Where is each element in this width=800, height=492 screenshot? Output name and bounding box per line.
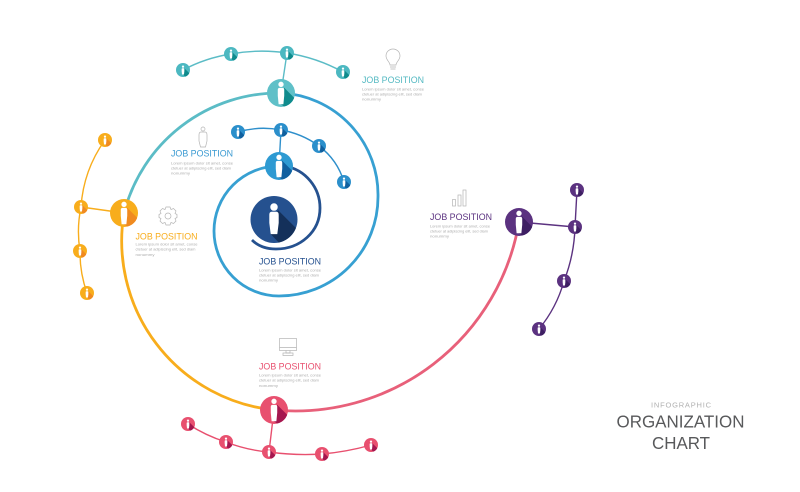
text: blue job position bbox=[171, 148, 234, 176]
node: yellow 3 bbox=[73, 244, 90, 262]
text: yellow job position: ctetuer at adipiscing elit, sed diam bbox=[136, 246, 196, 252]
text: teal job position bbox=[362, 75, 425, 102]
text: purple job position: nonummy bbox=[430, 234, 449, 238]
text: purple job position: ctetuer at adipiscing elit, sed diam bbox=[430, 228, 489, 234]
text: pink job position: Lorem ipsum dolor sit amet, conse bbox=[259, 372, 322, 378]
node: blue 2 bbox=[274, 123, 292, 140]
text: yellow job position bbox=[136, 232, 198, 257]
node: pink 1 bbox=[181, 417, 198, 434]
node: yellow 2 bbox=[74, 200, 92, 218]
node: purple 2 bbox=[568, 220, 586, 238]
node: blue main bbox=[265, 152, 300, 187]
branch: pink bbox=[181, 396, 382, 464]
text: dark blue job position bbox=[259, 256, 322, 282]
icon: light bulb bbox=[386, 49, 400, 69]
text: dark blue job position: ctetuer at adipiscing elit, sed diam bbox=[259, 272, 320, 278]
text: yellow job position: Lorem ipsum dolor sit amet, conse bbox=[136, 242, 198, 246]
text: purple job position: JOB POSITION bbox=[430, 212, 492, 222]
icon: monitor bbox=[280, 338, 296, 356]
text: blue job position: nonummy bbox=[171, 170, 190, 176]
text: pink job position: ctetuer at adipiscing elit, sed diam bbox=[259, 378, 320, 382]
node: pink main bbox=[260, 396, 295, 431]
title: CHART bbox=[652, 433, 710, 453]
icon: bar chart bbox=[452, 190, 466, 206]
text: dark blue job position: JOB POSITION bbox=[259, 256, 321, 266]
branch: blue bbox=[231, 123, 354, 192]
node: purple main bbox=[505, 208, 540, 243]
node: teal main bbox=[267, 79, 302, 114]
text: pink job position: JOB POSITION bbox=[259, 362, 321, 372]
node: pink 4 bbox=[315, 447, 332, 464]
text: purple job position: Lorem ipsum dolor sit amet, conse bbox=[430, 224, 491, 228]
text: teal job position: nonummy bbox=[362, 96, 381, 102]
branch: purple bbox=[505, 183, 588, 340]
node: teal 4 bbox=[336, 65, 354, 82]
icon: gear bbox=[159, 207, 177, 225]
text: teal job position: ctetuer at adipiscing elit, sed diam bbox=[362, 92, 423, 96]
text: dark blue job position: nonummy bbox=[259, 278, 278, 282]
icon: person outline bbox=[199, 127, 207, 147]
text: dark blue job position: Lorem ipsum dolor sit amet, conse bbox=[259, 268, 322, 272]
text: purple job position bbox=[430, 212, 492, 238]
text: teal job position: JOB POSITION bbox=[362, 75, 424, 85]
text: blue job position: Lorem ipsum dolor sit amet, conse bbox=[171, 160, 234, 166]
node: yellow 1 bbox=[98, 133, 116, 150]
node: teal 1 bbox=[176, 63, 194, 80]
branch: teal bbox=[176, 46, 354, 114]
node: teal 2 bbox=[224, 47, 242, 64]
node: pink 3 bbox=[262, 445, 280, 462]
node: center bbox=[250, 196, 309, 255]
branch: yellow bbox=[73, 133, 145, 304]
text: yellow job position: JOB POSITION bbox=[136, 232, 198, 242]
text: blue job position: JOB POSITION bbox=[171, 148, 233, 158]
spiral connector lines bbox=[122, 93, 519, 411]
node: blue 3 bbox=[312, 139, 330, 156]
node: yellow 4 bbox=[80, 286, 98, 304]
node: blue 1 bbox=[231, 125, 248, 142]
text: pink job position: nonummy bbox=[259, 383, 278, 388]
title: INFOGRAPHIC bbox=[651, 400, 712, 410]
node: blue 4 bbox=[337, 175, 354, 192]
node: yellow main bbox=[110, 199, 145, 234]
node: purple 4 bbox=[532, 322, 550, 340]
text: blue job position: ctetuer at adipiscing elit, sed diam bbox=[171, 166, 232, 170]
text: pink job position bbox=[259, 362, 322, 388]
text: yellow job position: nonummy bbox=[136, 252, 154, 257]
node: purple 3 bbox=[557, 274, 574, 292]
node: pink 2 bbox=[219, 435, 236, 452]
node: pink 5 bbox=[364, 438, 382, 456]
node: purple 1 bbox=[570, 183, 588, 200]
title bbox=[616, 400, 744, 453]
text: teal job position: Lorem ipsum dolor sit amet, conse bbox=[362, 86, 425, 92]
title: ORGANIZATION bbox=[616, 412, 744, 432]
node: teal 3 bbox=[280, 46, 298, 64]
